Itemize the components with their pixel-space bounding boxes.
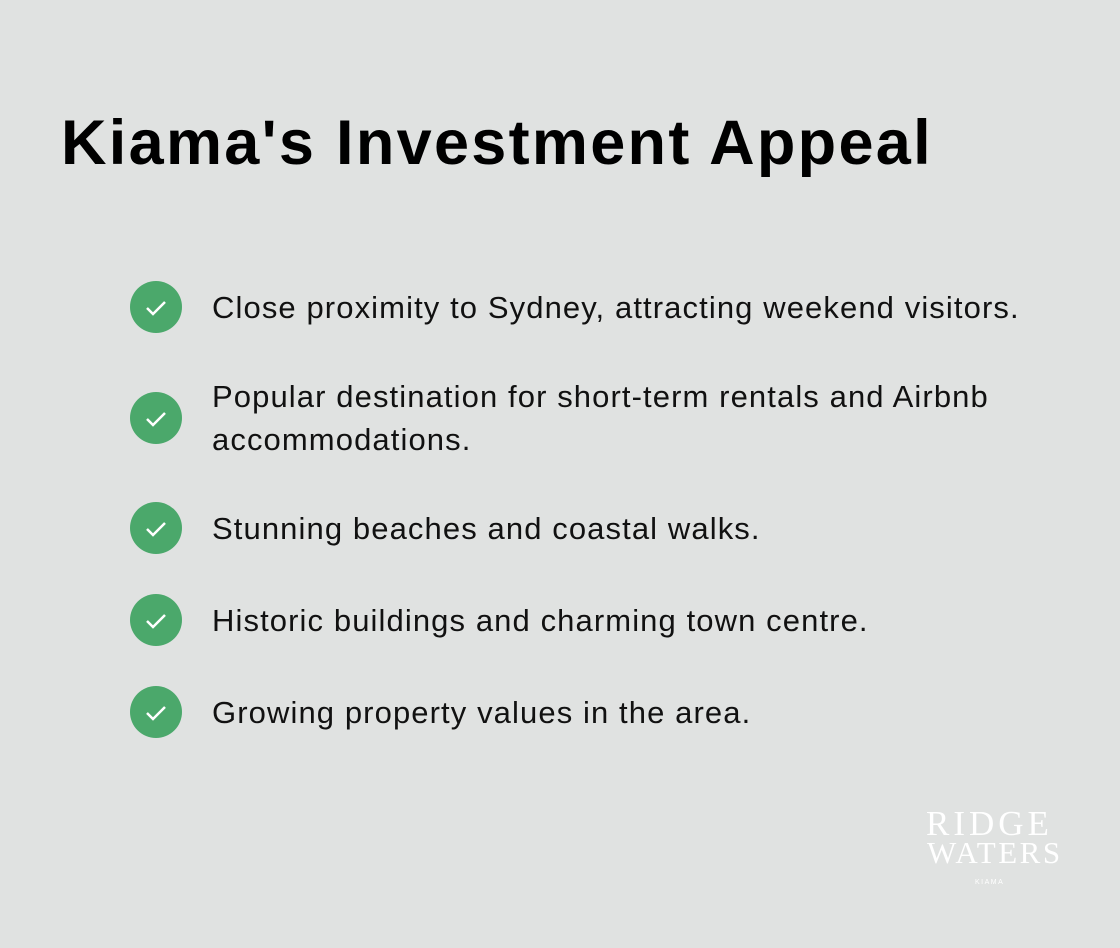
item 2: Popular destination for short-term rentals and Airbnb (212, 379, 989, 414)
item 2 (130, 379, 989, 457)
icon: check (130, 281, 182, 333)
item 4 (130, 594, 869, 646)
icon: check (130, 502, 182, 554)
icon: check (130, 392, 182, 444)
icon: check (130, 594, 182, 646)
item 3: Stunning beaches and coastal walks. (212, 511, 761, 546)
item 1: Close proximity to Sydney, attracting weekend visitors. (212, 290, 1020, 325)
item 5: Growing property values in the area. (212, 695, 751, 730)
title: Kiama's Investment Appeal (61, 108, 933, 178)
icon: check (130, 686, 182, 738)
item 2: accommodations. (212, 422, 471, 457)
logo (926, 804, 1063, 886)
item 4: Historic buildings and charming town centre. (212, 603, 869, 638)
item 1 (130, 281, 1020, 333)
logo: RIDGE (926, 804, 1053, 843)
logo: WATERS (927, 835, 1063, 870)
logo: KIAMA (975, 879, 1004, 886)
item 3 (130, 502, 761, 554)
item 5 (130, 686, 751, 738)
